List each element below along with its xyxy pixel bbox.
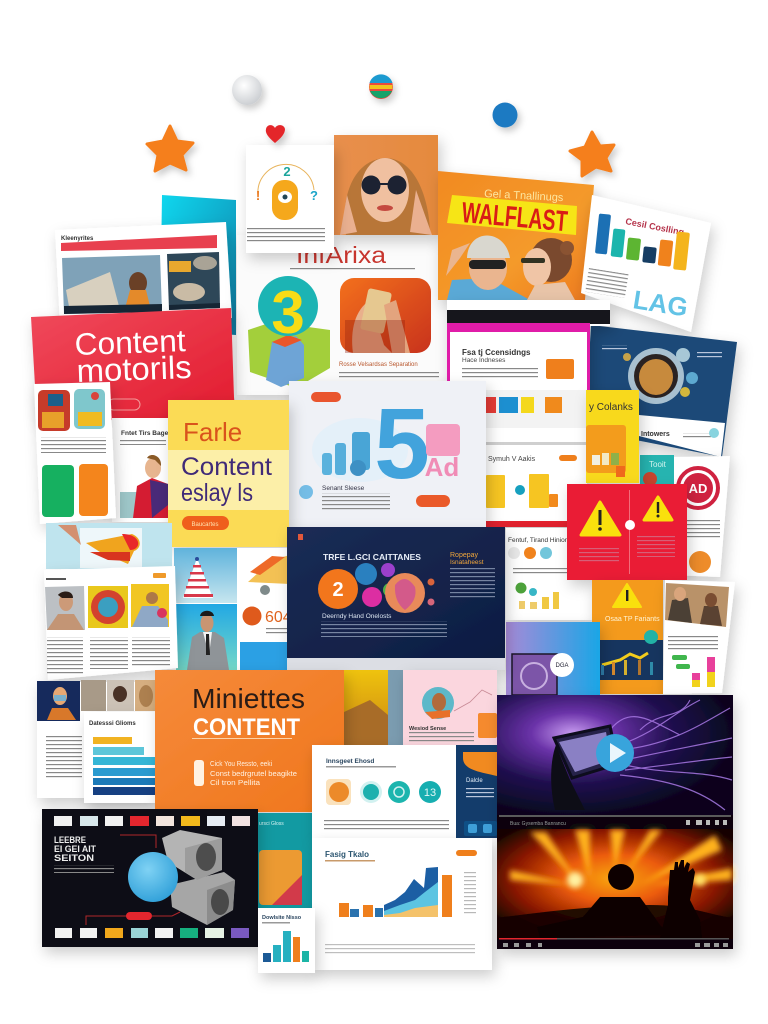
panel: tilted bar chart card: [581, 195, 711, 332]
mini stacked chart: [672, 655, 715, 687]
red progress bar: [499, 938, 729, 940]
panel: magenta app window: [447, 300, 610, 527]
nav bar: [61, 235, 217, 251]
doc label: [46, 578, 66, 580]
slide title: TRFE L.GCI CAITTANES: [323, 552, 421, 562]
hand: [58, 525, 81, 545]
pink blocks: [425, 424, 460, 482]
panel: mascot card: [246, 145, 334, 253]
card subheading: [262, 922, 290, 924]
card text lines: [324, 818, 449, 832]
side heading: Ropepay: [450, 552, 479, 559]
mini bars: [516, 582, 559, 609]
purple video frame: [497, 695, 733, 815]
panel: white toy and stat sheet: [237, 548, 292, 670]
panel: pink avatar card: [403, 670, 497, 745]
blue dot: [515, 485, 525, 495]
orange circle with number: [318, 569, 358, 609]
side text lines: [450, 568, 495, 600]
blue shape: [240, 642, 287, 670]
yellow box right: [529, 474, 549, 508]
blue buttons: [464, 821, 497, 836]
person silhouette right with raised hand: [660, 860, 702, 938]
orange thumbnail: [546, 359, 574, 379]
window subheading: Hace Indneses: [462, 357, 506, 364]
small orange dot: [428, 578, 434, 586]
column text left: [47, 637, 83, 675]
window text lines: [462, 366, 538, 378]
icon: teal ring: [388, 781, 410, 803]
panel: cyan backing sheet: [160, 195, 236, 335]
avatar: [422, 687, 454, 719]
panel: white photo doc: [663, 580, 735, 694]
photo: man in cap: [446, 236, 530, 300]
tab text lines: [466, 787, 494, 799]
diagram labels right: [697, 350, 722, 358]
card heading: Fasig Tkalo: [325, 850, 369, 859]
panel: document with photos: [44, 566, 178, 680]
red pill: [126, 912, 152, 920]
panel: website slide: [55, 222, 232, 325]
caption heading: Senant Sleese: [322, 485, 365, 492]
panel: red Content slide: [31, 308, 236, 420]
divider: [486, 442, 586, 445]
red stamp: AD: [689, 481, 707, 496]
orange button: [416, 495, 450, 507]
label: ursci Gloss: [259, 821, 284, 827]
panel: orange Miniettes slide: [155, 670, 344, 812]
icon circles: [508, 547, 552, 559]
slide text lines: [54, 865, 114, 873]
column text mid: [90, 637, 128, 669]
fire video frame: [497, 829, 733, 939]
small pink dot: [428, 598, 434, 606]
panel: left booklet: [34, 382, 116, 524]
slide heading: Farle: [183, 417, 242, 447]
photo: two people: [665, 583, 729, 627]
side labels: [464, 870, 476, 916]
lower control glyphs: [503, 943, 728, 947]
framed art: [512, 654, 557, 695]
inner orange chart: [586, 425, 626, 477]
body text line one: Cick You Ressto, eeki: [210, 759, 272, 768]
panel: light blue strip with toy: [46, 523, 172, 569]
body text lines: [321, 621, 447, 637]
stat lines: [266, 626, 288, 634]
icon: blue ball: [492, 102, 518, 128]
panel: yellow Content slide: [168, 400, 289, 547]
icon: white ball: [232, 75, 262, 105]
lower white section: Intowers: [641, 431, 670, 438]
photo: collage: [167, 252, 220, 310]
tab heading: Dalcle: [466, 778, 483, 784]
panel: main 3D numbers slide: [289, 381, 486, 527]
panel: teal slide: [258, 813, 312, 909]
bottom cube: [170, 872, 235, 925]
photo: woman in glasses: [521, 238, 575, 300]
icon row: [486, 428, 586, 444]
navy chart block: [592, 630, 663, 680]
caption: Rosse Velsardsas Separation: [339, 362, 418, 368]
logo: [298, 534, 303, 540]
booklet text lines: [41, 437, 106, 453]
photo: woman: [45, 586, 85, 630]
panel: small bar chart card: [258, 908, 315, 973]
bar chart: [595, 213, 690, 271]
top thumbnail row: [54, 816, 250, 826]
card heading: Datesssi Glioms: [89, 721, 136, 727]
card title: y Colanks: [589, 402, 633, 413]
bubble green: [383, 583, 397, 597]
icon: yellow mascot: 2: [283, 164, 291, 179]
photo: man in grey suit: [176, 604, 237, 670]
orange tag: [79, 464, 108, 516]
tablet: [554, 726, 618, 778]
orange pill: [559, 455, 577, 461]
right text lines: [637, 535, 675, 557]
orange mini window: [478, 713, 497, 738]
rule: [192, 738, 292, 739]
icon: warning triangle large: [581, 502, 620, 535]
icon: red-yellow toy: [86, 534, 140, 564]
panel: navy side tab: [456, 745, 497, 838]
card heading: Innsgeet Ehosd: [326, 758, 374, 765]
stat icon: [242, 606, 262, 626]
panel: four circles card: [312, 745, 456, 838]
round photo: [623, 348, 698, 404]
caption heading: Wesiod Sense: [409, 726, 446, 732]
area chart: [384, 867, 438, 917]
red callout arrow bottom: [86, 912, 180, 925]
card heading: Cesil Coslling: [625, 216, 685, 237]
slide subtitle: CONTENT: [193, 714, 300, 741]
body heading: Deerndy Hand Onelosts: [322, 613, 392, 620]
orange button: [456, 850, 477, 856]
heading: InfArixa: [296, 242, 386, 268]
icon: blue splash: [299, 485, 313, 499]
caption text lines: [339, 370, 439, 380]
top cube: [162, 830, 222, 880]
panel: orange warning poster: [592, 580, 663, 694]
blue sphere: [128, 852, 178, 902]
teal tab: Tooit: [649, 460, 667, 469]
orange button top: [311, 392, 341, 402]
diagram labels: [602, 345, 627, 352]
red strip: [486, 521, 576, 527]
panel: WALFLAST poster: [438, 171, 594, 300]
photo strip 2: [81, 680, 106, 711]
slide title: Miniettes: [192, 683, 305, 714]
photo strip 3: [107, 680, 134, 711]
photo circle: [385, 573, 425, 613]
outline button: [108, 399, 140, 410]
icon: warning triangle small: [644, 497, 672, 520]
panel: navy diagram slide: [585, 325, 737, 457]
player control glyphs: [686, 820, 727, 825]
panel: black slide with cubes: [42, 809, 258, 947]
panel: dark Content slide: [287, 527, 505, 670]
thumbnail: abstract red: [38, 390, 70, 431]
photo: woman with glasses: [334, 135, 438, 235]
panel: white data doc: [506, 528, 592, 620]
slide title: LEEBRE: [54, 835, 86, 846]
slide title line one: Content: [181, 453, 272, 481]
left bars: [339, 903, 383, 917]
slide title: Content: [74, 323, 187, 362]
play button: [596, 734, 634, 772]
icon: striped ball: [369, 74, 393, 99]
orange tag: [153, 573, 166, 578]
panel: video player: [497, 695, 733, 949]
tall orange bar: [442, 875, 452, 917]
slide subtitle: motorils: [76, 349, 192, 389]
icon: teal circle: [360, 781, 382, 803]
slide title line two: eslay ls: [181, 479, 253, 507]
3D cylinders: [322, 432, 370, 476]
panel: blue-purple art card: [506, 622, 600, 695]
bubble magenta: [362, 587, 382, 607]
body text lines: [585, 268, 629, 298]
doc text lines: [513, 567, 578, 575]
red callout arrow top: [120, 835, 156, 848]
left text lines: [579, 546, 619, 564]
stat number: 604: [265, 609, 292, 626]
button: [182, 516, 229, 530]
icon: yellow mascot: !: [256, 188, 260, 203]
panel: stamp card: [640, 455, 730, 577]
icon: number 3 with cube: 3: [271, 279, 305, 346]
horizontal bar chart: [93, 737, 155, 795]
centre dot: [625, 520, 635, 530]
slide title line two: EI GEI AIT: [54, 844, 96, 855]
person silhouette left: [537, 864, 670, 938]
panel: desert photo: [344, 670, 388, 745]
banner with title: [447, 195, 577, 238]
panel: chart report card: [312, 838, 492, 970]
icon: teal glyph: [419, 781, 441, 803]
bottom thumbnail row: [55, 928, 249, 938]
caption text lines: [409, 732, 474, 744]
panel: red warning card: [567, 484, 687, 580]
column text right: [132, 637, 170, 667]
colour swatches: [486, 390, 586, 428]
caption text lines: [322, 493, 390, 510]
panel: horizontal bars card: [84, 712, 155, 803]
photo: person in mask: [37, 681, 80, 721]
icon: left star: [147, 126, 193, 171]
bar chart: [263, 931, 309, 962]
footer text lines: [325, 944, 475, 956]
slide title line three: SEITON: [54, 853, 94, 864]
photo: hands with phone: [340, 278, 431, 353]
photo: colourful: [88, 586, 128, 628]
icon: toy car: [248, 555, 290, 595]
orange circle with number: 2: [332, 579, 344, 601]
thumbnail: colourful: [74, 389, 105, 429]
player title: Bua: Gysemba Banrancu: [510, 821, 566, 827]
page text lines: [120, 439, 166, 445]
big number 5: 5: [374, 388, 430, 500]
banner with title: WALFLAST: [460, 197, 569, 238]
photo: yellow people: [131, 584, 169, 627]
dark floor: [497, 905, 733, 939]
decorative ornaments: [147, 74, 614, 176]
icon: heart: [266, 125, 285, 143]
orange tab: [463, 752, 497, 776]
sparkline: [454, 690, 492, 711]
panel: page with woman: [112, 418, 170, 522]
card subheading: [325, 860, 375, 862]
side subheading: Isnataheest: [450, 559, 484, 566]
poster heading: Osaa TP Fariants: [605, 616, 660, 623]
icon: yellow mascot: [256, 164, 318, 220]
site logo text: Kleenyrites: [61, 236, 94, 242]
photo: woman on boat: [62, 255, 162, 314]
player progress bar: [499, 815, 731, 817]
subheading lines: [290, 268, 415, 270]
panel: yellow chart card: [586, 390, 639, 483]
panel: doc with mask portrait: [37, 680, 155, 798]
text lines: [687, 520, 720, 540]
icon: small: [194, 760, 204, 786]
body text line three: Cil tron Pellita: [210, 778, 261, 787]
photo strip 4: [135, 680, 155, 711]
poster tagline: Gel a Tnallinugs: [484, 188, 564, 204]
flame rays: [510, 830, 732, 885]
window heading: Fsa tj Ccensidngs: [462, 348, 531, 357]
page heading: Fntet Tirs Bage: [121, 430, 169, 437]
card subheading: [326, 766, 396, 768]
body text line two: Const bedrgrutel beagikte: [210, 769, 297, 778]
orange accent: [549, 494, 558, 507]
card text lines: [247, 227, 325, 244]
hand silhouette: [551, 745, 585, 810]
lower heading: Symuh V Aakis: [488, 456, 536, 463]
light strands: [610, 700, 732, 810]
glow right: [694, 874, 706, 886]
strip: blue stripes: [388, 670, 403, 745]
icon: orange circle: [326, 779, 351, 805]
pink blocks: Ad: [425, 452, 459, 482]
icon: warning triangle: [613, 584, 641, 607]
bubble purple: [381, 563, 395, 577]
inner orange card: [259, 850, 302, 905]
icon: striped pyramid: [183, 557, 213, 598]
label circle: DGA: [555, 663, 569, 669]
icon: yellow mascot: ?: [310, 188, 318, 203]
big LAG letters: LAG: [631, 284, 690, 323]
yellow box left: [486, 475, 505, 508]
panel: Arixa infographic: [237, 235, 447, 395]
panel: sky pyramid photo: [174, 548, 237, 603]
colour blob: [689, 551, 711, 573]
doc text lines: [668, 636, 718, 650]
icon: number 3 with cube: [248, 276, 330, 388]
glow left: [567, 872, 583, 888]
photo: woman in red: [120, 455, 168, 518]
pale splash: [312, 418, 408, 482]
doc heading: Fentuf, Tirand Hiniores: [508, 537, 575, 544]
icon: teal glyph: 13: [424, 787, 436, 799]
button: Baucartes: [191, 522, 219, 528]
bubble blue: [355, 563, 377, 585]
doc text lines: [46, 735, 82, 780]
green tag: [42, 465, 74, 517]
lower white section: [639, 415, 725, 457]
card heading: Dowlsite Nisso: [262, 915, 302, 921]
icon: right star: [570, 132, 614, 176]
